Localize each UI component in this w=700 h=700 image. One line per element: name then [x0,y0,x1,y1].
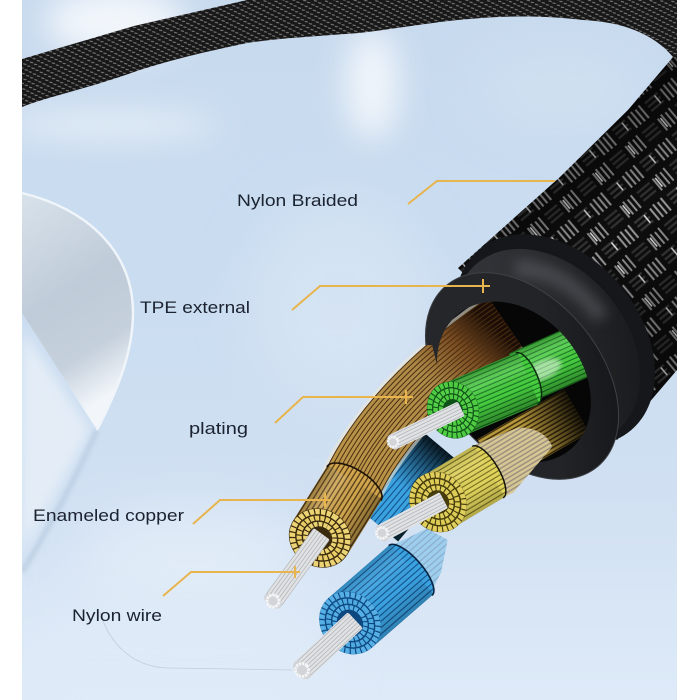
callout: Nylon wire [72,566,300,625]
rear: green strand [509,331,588,398]
callout: Enameled copper [33,493,331,525]
core: blue strand nylon wire [290,612,363,682]
rear: brown strand [352,322,505,484]
decorative ribbon [22,193,292,670]
callout: TPE external: TPE external [140,298,250,317]
core: yellow strand nylon wire [373,492,448,544]
brown strand end face [278,497,362,579]
blue strand rear sheath [390,515,467,593]
green strand end face [418,373,488,447]
core: green strand nylon wire [385,401,465,451]
green strand front [418,348,548,447]
yellow strand end face [398,461,478,543]
callout: plating [189,390,413,438]
blue strand front [306,538,441,667]
callout: Enameled copper: Enameled copper [33,506,184,525]
rear strands [352,322,591,541]
brown strand front [278,455,388,579]
TPE connector collar [386,195,696,517]
blue strand end face [306,579,394,667]
rear: blue strand [359,432,462,541]
callout: Nylon Braided: Nylon Braided [237,191,358,210]
yellow strand front [398,440,513,543]
callout: Nylon wire: Nylon wire [72,606,162,625]
callout: plating: plating [189,419,248,438]
TPE front ring [386,235,658,517]
rear: olive strand [477,389,586,461]
callout: Nylon Braided [237,181,555,210]
yellow strand rear sheath [472,411,562,499]
main section of braided cable [458,57,677,440]
top section of braided cable [22,0,677,107]
callout: TPE external [140,279,490,317]
core: brown strand nylon wire [261,528,330,612]
